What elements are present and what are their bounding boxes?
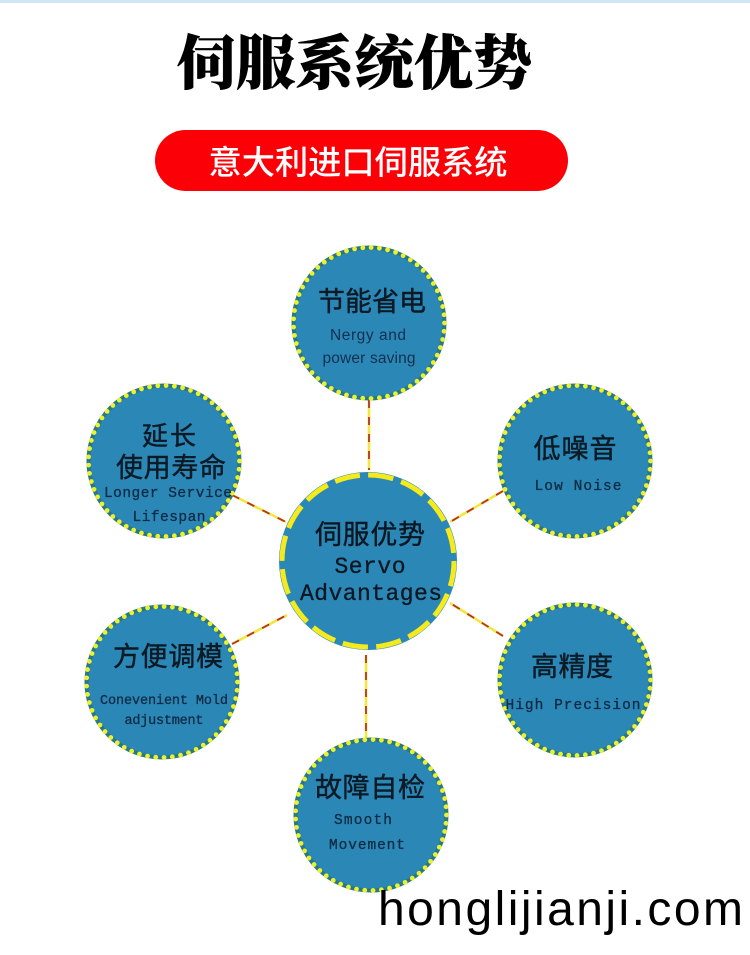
node: servo advantages centre: Advantages <box>300 581 442 607</box>
node: convenient mold adjustment <box>86 606 238 758</box>
node: high precision: High Precision <box>506 698 640 714</box>
node: longer service life: Longer Service <box>104 486 232 502</box>
node: longer service life: 使用寿命 <box>116 453 226 483</box>
node: longer service life: Lifespan <box>132 510 206 526</box>
node: high precision: 高精度 <box>531 652 613 682</box>
node: energy saving <box>294 248 444 398</box>
node: servo advantages centre: 伺服优势 <box>315 520 425 550</box>
node: longer service life: 延长 <box>142 421 196 451</box>
node: low noise: 低噪音 <box>534 434 616 464</box>
watermark url: honglijianji.com <box>378 883 743 936</box>
title: 伺服系统优势 <box>176 31 532 97</box>
node: convenient mold adjustment: Conevenient Mold <box>100 694 228 709</box>
connector lines <box>232 400 503 738</box>
node: smooth movement: Smooth <box>334 813 392 829</box>
node: servo advantages centre <box>279 472 457 650</box>
subtitle pill <box>155 130 568 191</box>
node: convenient mold adjustment: adjustment <box>124 714 204 729</box>
node: high precision <box>500 604 650 756</box>
node: energy saving: Nergy and <box>330 327 406 344</box>
node: smooth movement: Movement <box>329 838 405 854</box>
subtitle pill: 意大利进口伺服系统 <box>208 144 508 181</box>
node: low noise <box>500 386 650 536</box>
node: convenient mold adjustment: 方便调模 <box>113 642 223 672</box>
node: energy saving: 节能省电 <box>318 287 426 317</box>
node: energy saving: power saving <box>322 350 416 367</box>
node: servo advantages centre: Servo <box>334 554 406 580</box>
node: smooth movement: 故障自检 <box>315 773 425 803</box>
node: low noise: Low Noise <box>534 479 622 495</box>
node: longer service life <box>88 386 240 536</box>
node: smooth movement <box>296 740 446 890</box>
